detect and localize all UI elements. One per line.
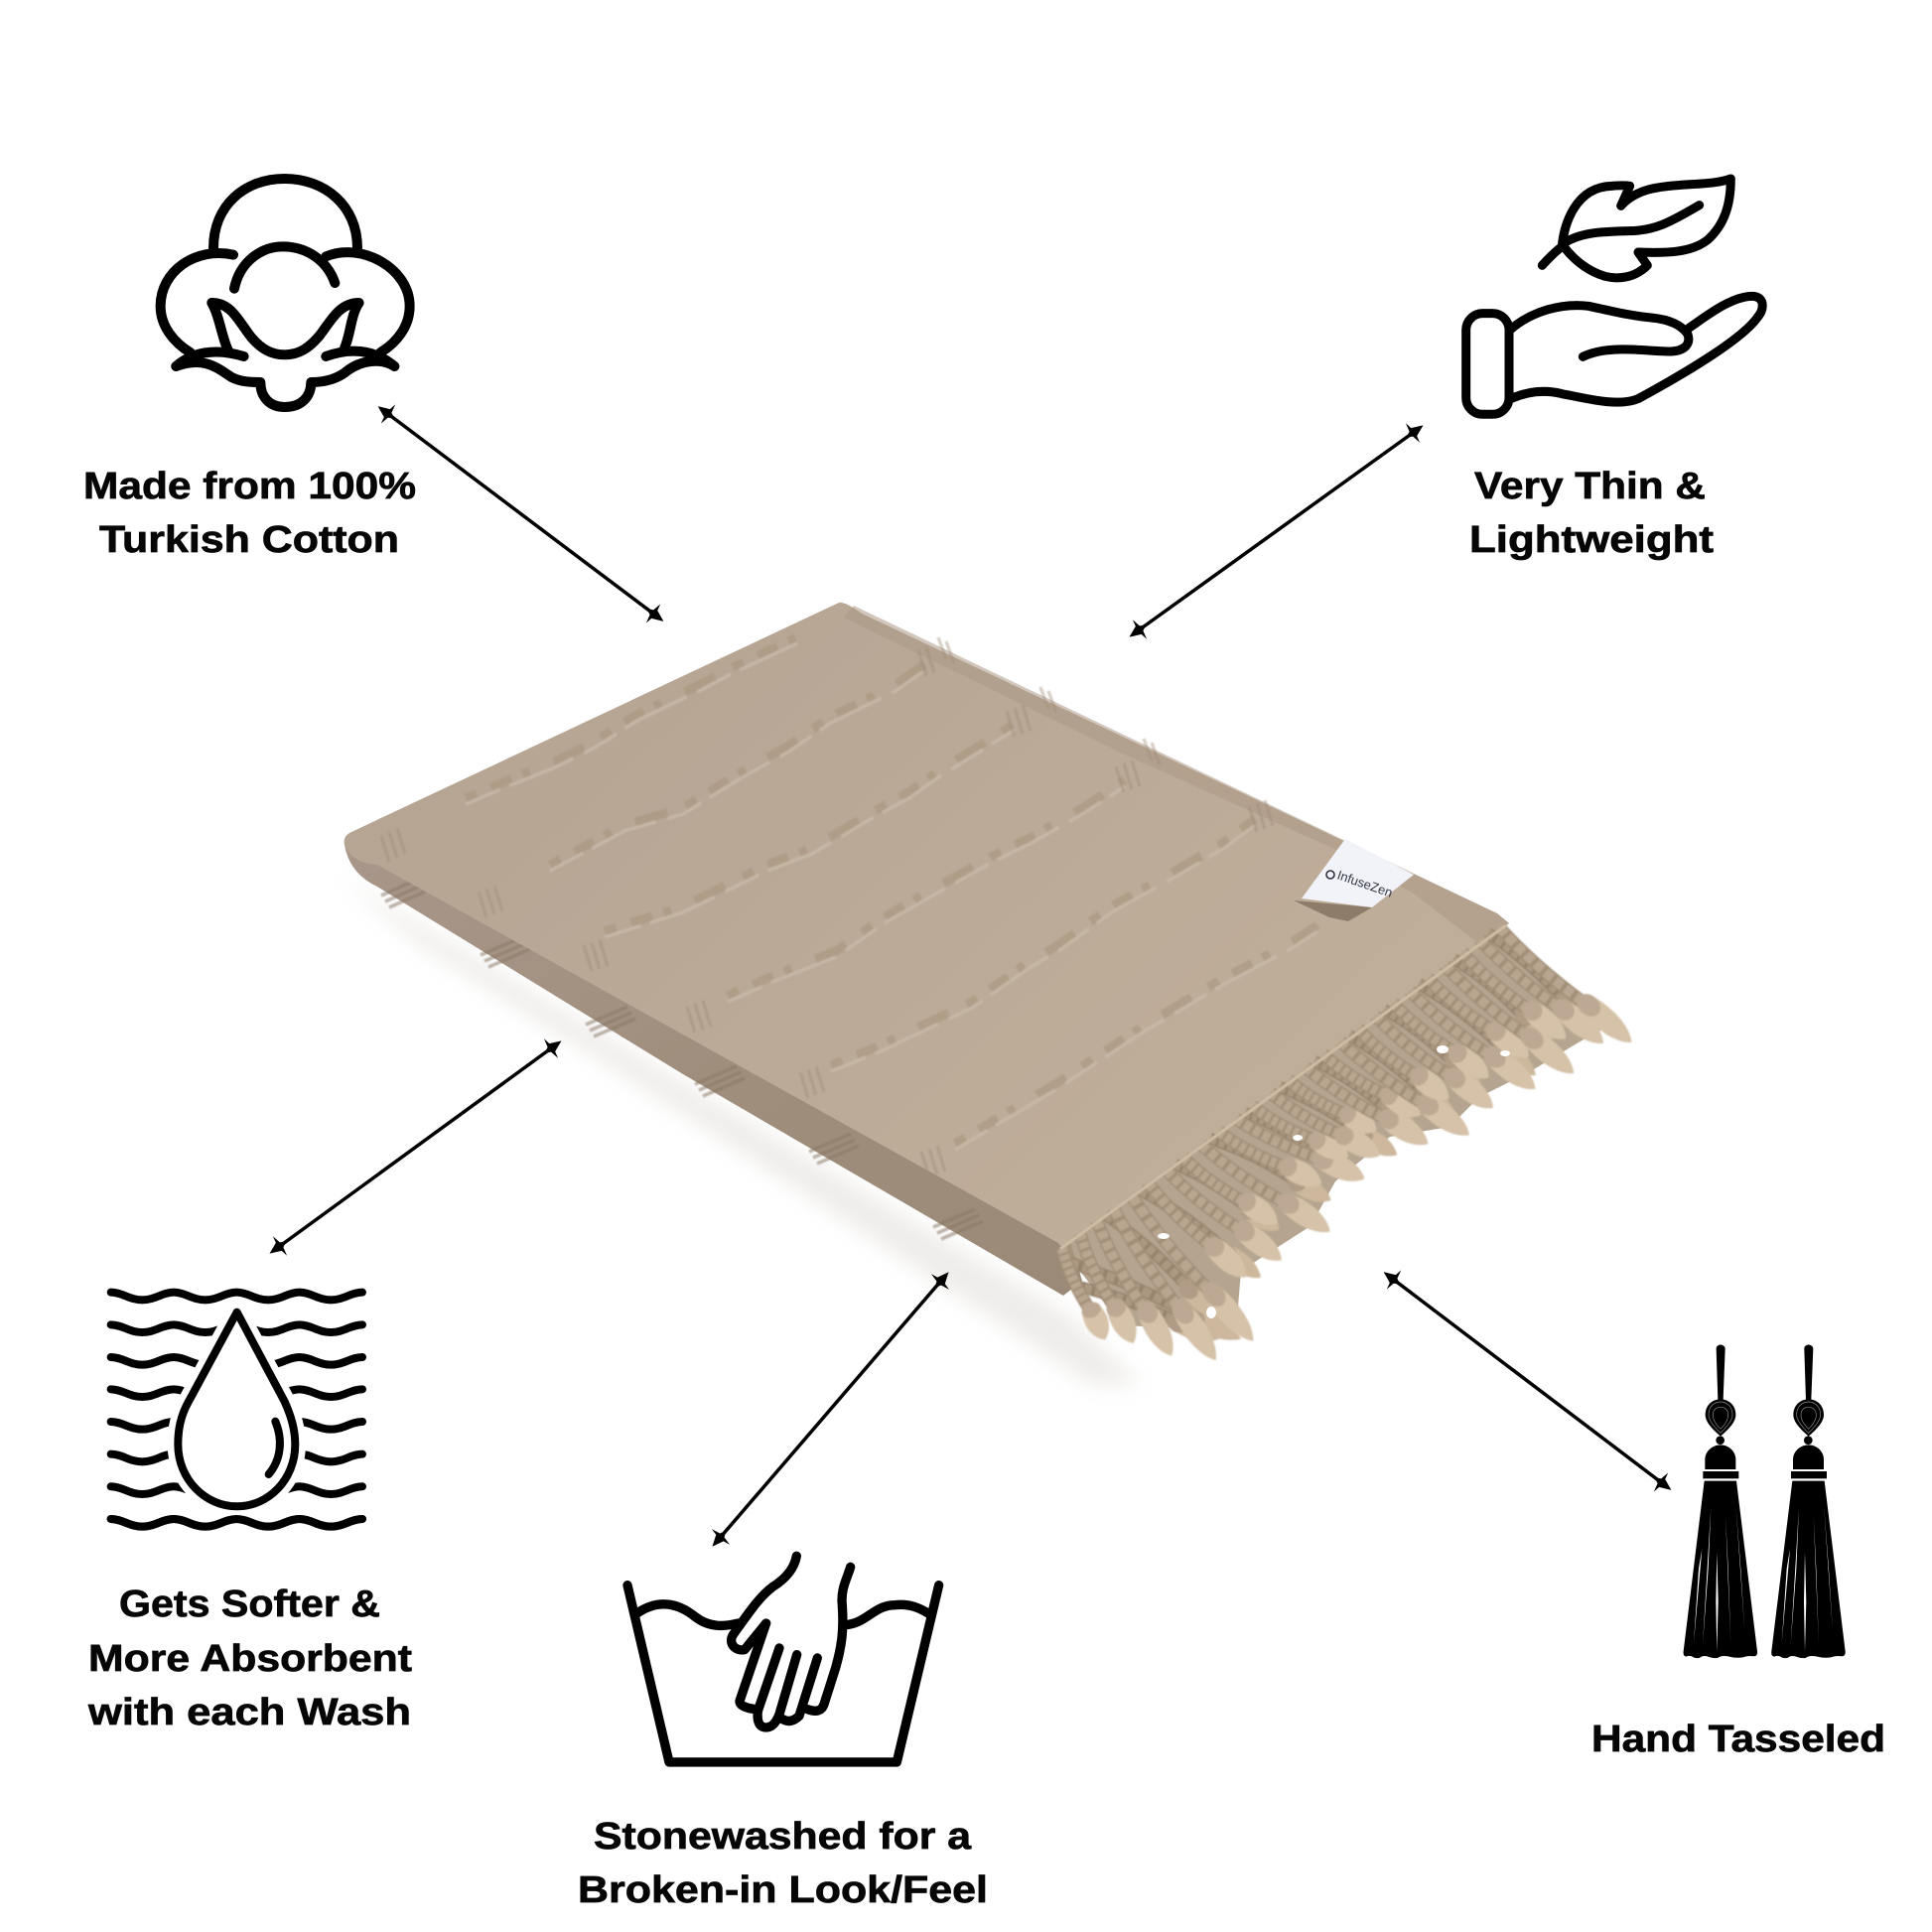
label: Very Thin & Lightweight: Lightweight: [1469, 519, 1714, 561]
label: Very Thin & Lightweight: [1469, 466, 1714, 561]
icon: wash tub with hand: [627, 1556, 939, 1762]
icon: pair of tassels: [1684, 1344, 1846, 1658]
label: Made from 100% Turkish Cotton: Turkish Cotton: [99, 519, 399, 561]
fringe backing: [1062, 928, 1613, 1330]
panel: Gets Softer & More Absorbent with each Wash: [87, 1293, 412, 1733]
rib blocks on top surface: [381, 637, 1273, 1177]
towel lower fold: [345, 845, 1082, 1296]
fold ribs: [381, 880, 983, 1239]
sewn label: InfuseZen: [1335, 868, 1395, 900]
panel: Hand Tasseled: [1591, 1344, 1885, 1760]
label shadow: [1294, 900, 1372, 921]
arrow: tassels to towel: [1376, 1263, 1679, 1499]
arrow: absorbent to towel: [262, 1032, 569, 1263]
arrow: stonewashed to towel: [703, 1264, 958, 1555]
label: Gets Softer & More Absorbent with each Wash: Gets Softer &: [119, 1584, 380, 1625]
label: Hand Tasseled: Hand Tasseled: [1591, 1719, 1885, 1760]
label: Gets Softer & More Absorbent with each Wash: [87, 1584, 412, 1733]
label: Very Thin & Lightweight: Very Thin &: [1474, 466, 1706, 507]
fringe woven edge: [1060, 925, 1506, 1249]
panel: Stonewashed for a Broken-in Look/Feel: [578, 1556, 988, 1911]
icon: leaf over open hand: [1466, 179, 1762, 414]
towel top hem: [844, 606, 1509, 943]
label: Stonewashed for a Broken-in Look/Feel: Stonewashed for a: [594, 1816, 972, 1858]
label: Gets Softer & More Absorbent with each Wash: More Absorbent: [88, 1638, 412, 1680]
arrow: cotton to towel: [370, 397, 671, 630]
label: Stonewashed for a Broken-in Look/Feel: [578, 1816, 988, 1911]
label: Gets Softer & More Absorbent with each Wash: with each Wash: [87, 1692, 411, 1733]
panel: Made from 100% Turkish Cotton: [83, 179, 416, 561]
photo: folded taupe towel with tasseled fringe: [338, 603, 1639, 1385]
fringe tassels back layer: [1066, 925, 1605, 1348]
label: Made from 100% Turkish Cotton: Made from 100%: [83, 466, 416, 507]
icon: cotton boll: [161, 179, 410, 407]
panel: Very Thin & Lightweight: [1466, 179, 1762, 561]
label: Stonewashed for a Broken-in Look/Feel: Broken-in Look/Feel: [578, 1869, 988, 1911]
label: Made from 100% Turkish Cotton: [83, 466, 416, 561]
icon: water drop over waves: [111, 1293, 362, 1527]
fringe gaps: [1158, 1045, 1510, 1318]
towel soft shadow: [338, 874, 1142, 1385]
woven stripes: [381, 637, 1317, 1177]
towel top surface: [345, 603, 1509, 1248]
arrow: lightweight to towel: [1122, 416, 1431, 646]
fringe tassels front layer: [1051, 918, 1639, 1367]
sewn label: [1302, 839, 1414, 907]
